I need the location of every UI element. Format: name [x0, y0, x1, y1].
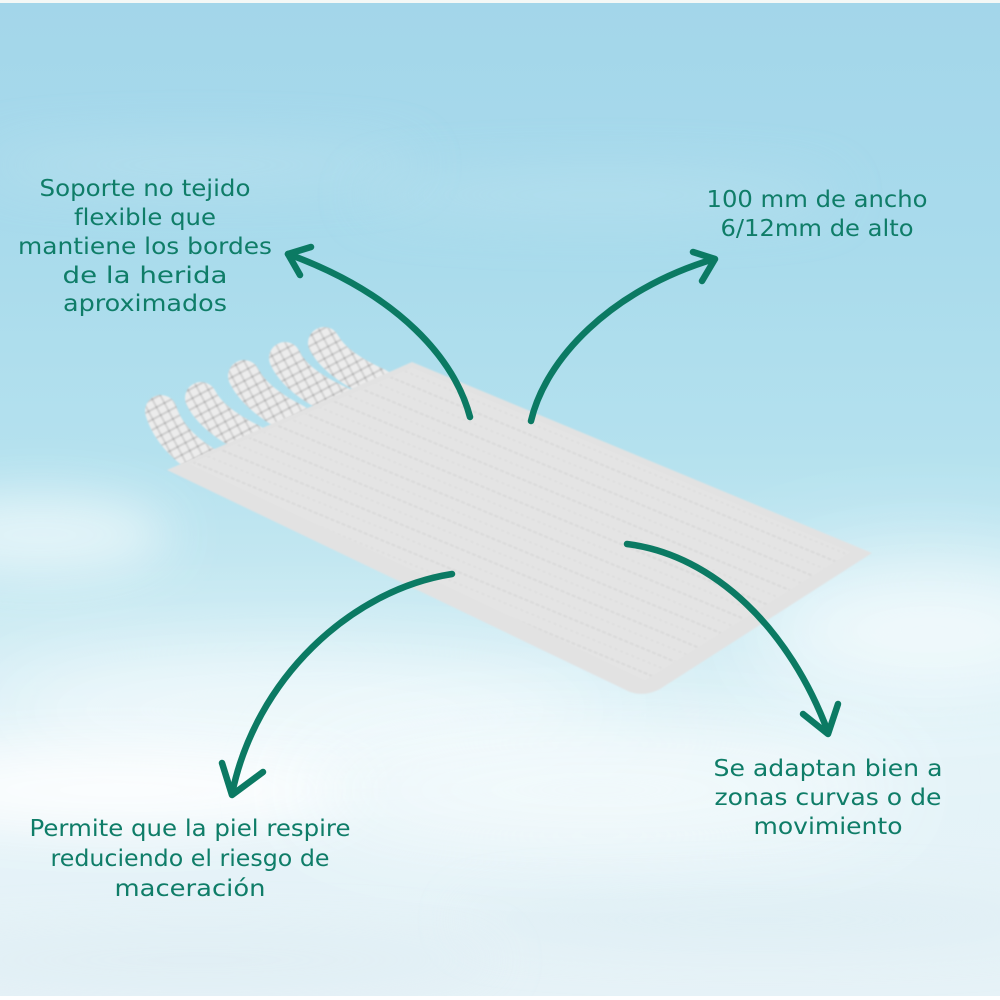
text: dimensions: [706, 187, 928, 242]
arrow: up-right to dimensions label: [531, 252, 715, 421]
arrow: down-right to curved zones label: [627, 544, 838, 734]
text: curved zones: Se adaptan bien a: [714, 756, 942, 782]
text: non-woven support: mantiene los bordes: [18, 234, 272, 260]
text: curved zones: movimiento: [754, 814, 902, 840]
text: breathable: maceración: [114, 876, 266, 902]
text: non-woven support: flexible que: [74, 205, 216, 231]
text: non-woven support: de la herida: [62, 263, 228, 289]
text: breathable: reduciendo el riesgo de: [50, 846, 330, 872]
text: curved zones: [714, 756, 942, 840]
arrow: down-left to breathable label: [222, 574, 452, 795]
text: non-woven support: Soporte no tejido: [40, 176, 250, 202]
text: breathable: Permite que la piel respire: [30, 816, 350, 842]
text: non-woven support: aproximados: [63, 291, 227, 317]
mesh tabs: [161, 343, 378, 462]
strip sheet: [167, 362, 872, 694]
product: adhesive wound closure strip: [161, 343, 872, 694]
text: dimensions: 100 mm de ancho: [706, 187, 928, 213]
text: curved zones: zonas curvas o de: [714, 785, 942, 811]
text: dimensions: 6/12mm de alto: [720, 216, 914, 242]
text: non-woven support: [18, 176, 272, 317]
arrow: up-left to non-woven support label: [288, 247, 470, 417]
text: breathable: [30, 816, 350, 902]
